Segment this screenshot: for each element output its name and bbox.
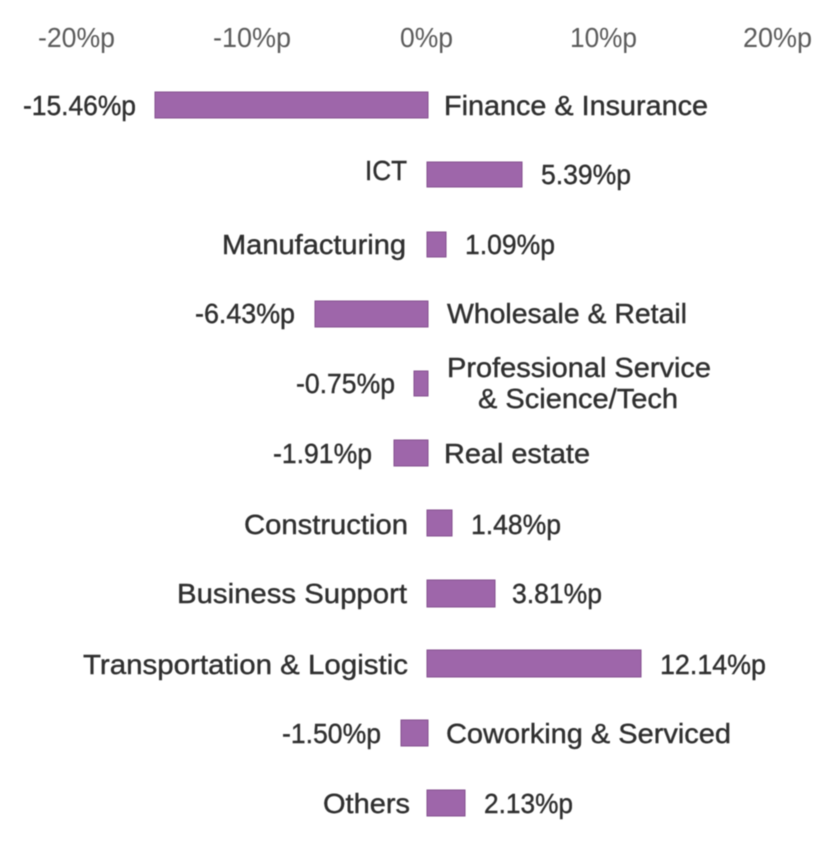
row: Professional Service & Science/Tech <box>296 352 711 414</box>
row: Business Support: 3.81%p <box>512 578 602 609</box>
row: Finance & Insurance: Finance & Insurance <box>444 90 708 121</box>
row: Coworking & Serviced: Coworking & Serviced <box>446 718 731 749</box>
row: Business Support: Business Support <box>177 578 407 609</box>
row: Finance & Insurance <box>23 90 708 121</box>
row: Transportation & Logistic <box>83 649 766 680</box>
row: Professional Service & Science/Tech: Professional Service <box>447 352 711 383</box>
row: Professional Service & Science/Tech: & Science/Tech <box>478 383 678 414</box>
row: Real estate <box>273 438 590 469</box>
axis labels: 20%p <box>743 22 812 53</box>
row: Wholesale & Retail: -6.43%p <box>195 298 295 329</box>
row: Others <box>323 788 573 819</box>
row: Real estate: -1.91%p <box>273 438 372 469</box>
row: Real estate: Real estate <box>444 438 590 469</box>
row: Construction: Construction <box>244 509 408 540</box>
row: Coworking & Serviced: -1.50%p <box>282 718 381 749</box>
row: Construction <box>244 509 561 540</box>
row: Others: Others <box>323 788 410 819</box>
axis labels: 10%p <box>570 22 637 53</box>
row: Manufacturing: Manufacturing <box>222 229 406 260</box>
row: ICT: 5.39%p <box>541 159 631 190</box>
axis labels: 0%p <box>400 22 453 53</box>
row: Wholesale & Retail <box>195 298 687 329</box>
row: Transportation & Logistic: 12.14%p <box>660 649 766 680</box>
row: Manufacturing: 1.09%p <box>465 229 555 260</box>
row: Finance & Insurance: -15.46%p <box>23 90 136 121</box>
row: Coworking & Serviced <box>282 718 731 749</box>
row: Others: 2.13%p <box>484 788 573 819</box>
row: Professional Service & Science/Tech: -0.75%p <box>296 368 395 399</box>
row: Transportation & Logistic: Transportation & Logistic <box>83 649 408 680</box>
row: Wholesale & Retail: Wholesale & Retail <box>447 298 687 329</box>
row: ICT <box>365 155 631 190</box>
axis labels: -20%p <box>38 22 115 53</box>
row: Construction: 1.48%p <box>471 509 561 540</box>
axis labels: -10%p <box>213 22 291 53</box>
row: Business Support <box>177 578 602 609</box>
row: Manufacturing <box>222 229 555 260</box>
axis labels <box>38 22 812 53</box>
row: ICT: ICT <box>365 155 407 186</box>
